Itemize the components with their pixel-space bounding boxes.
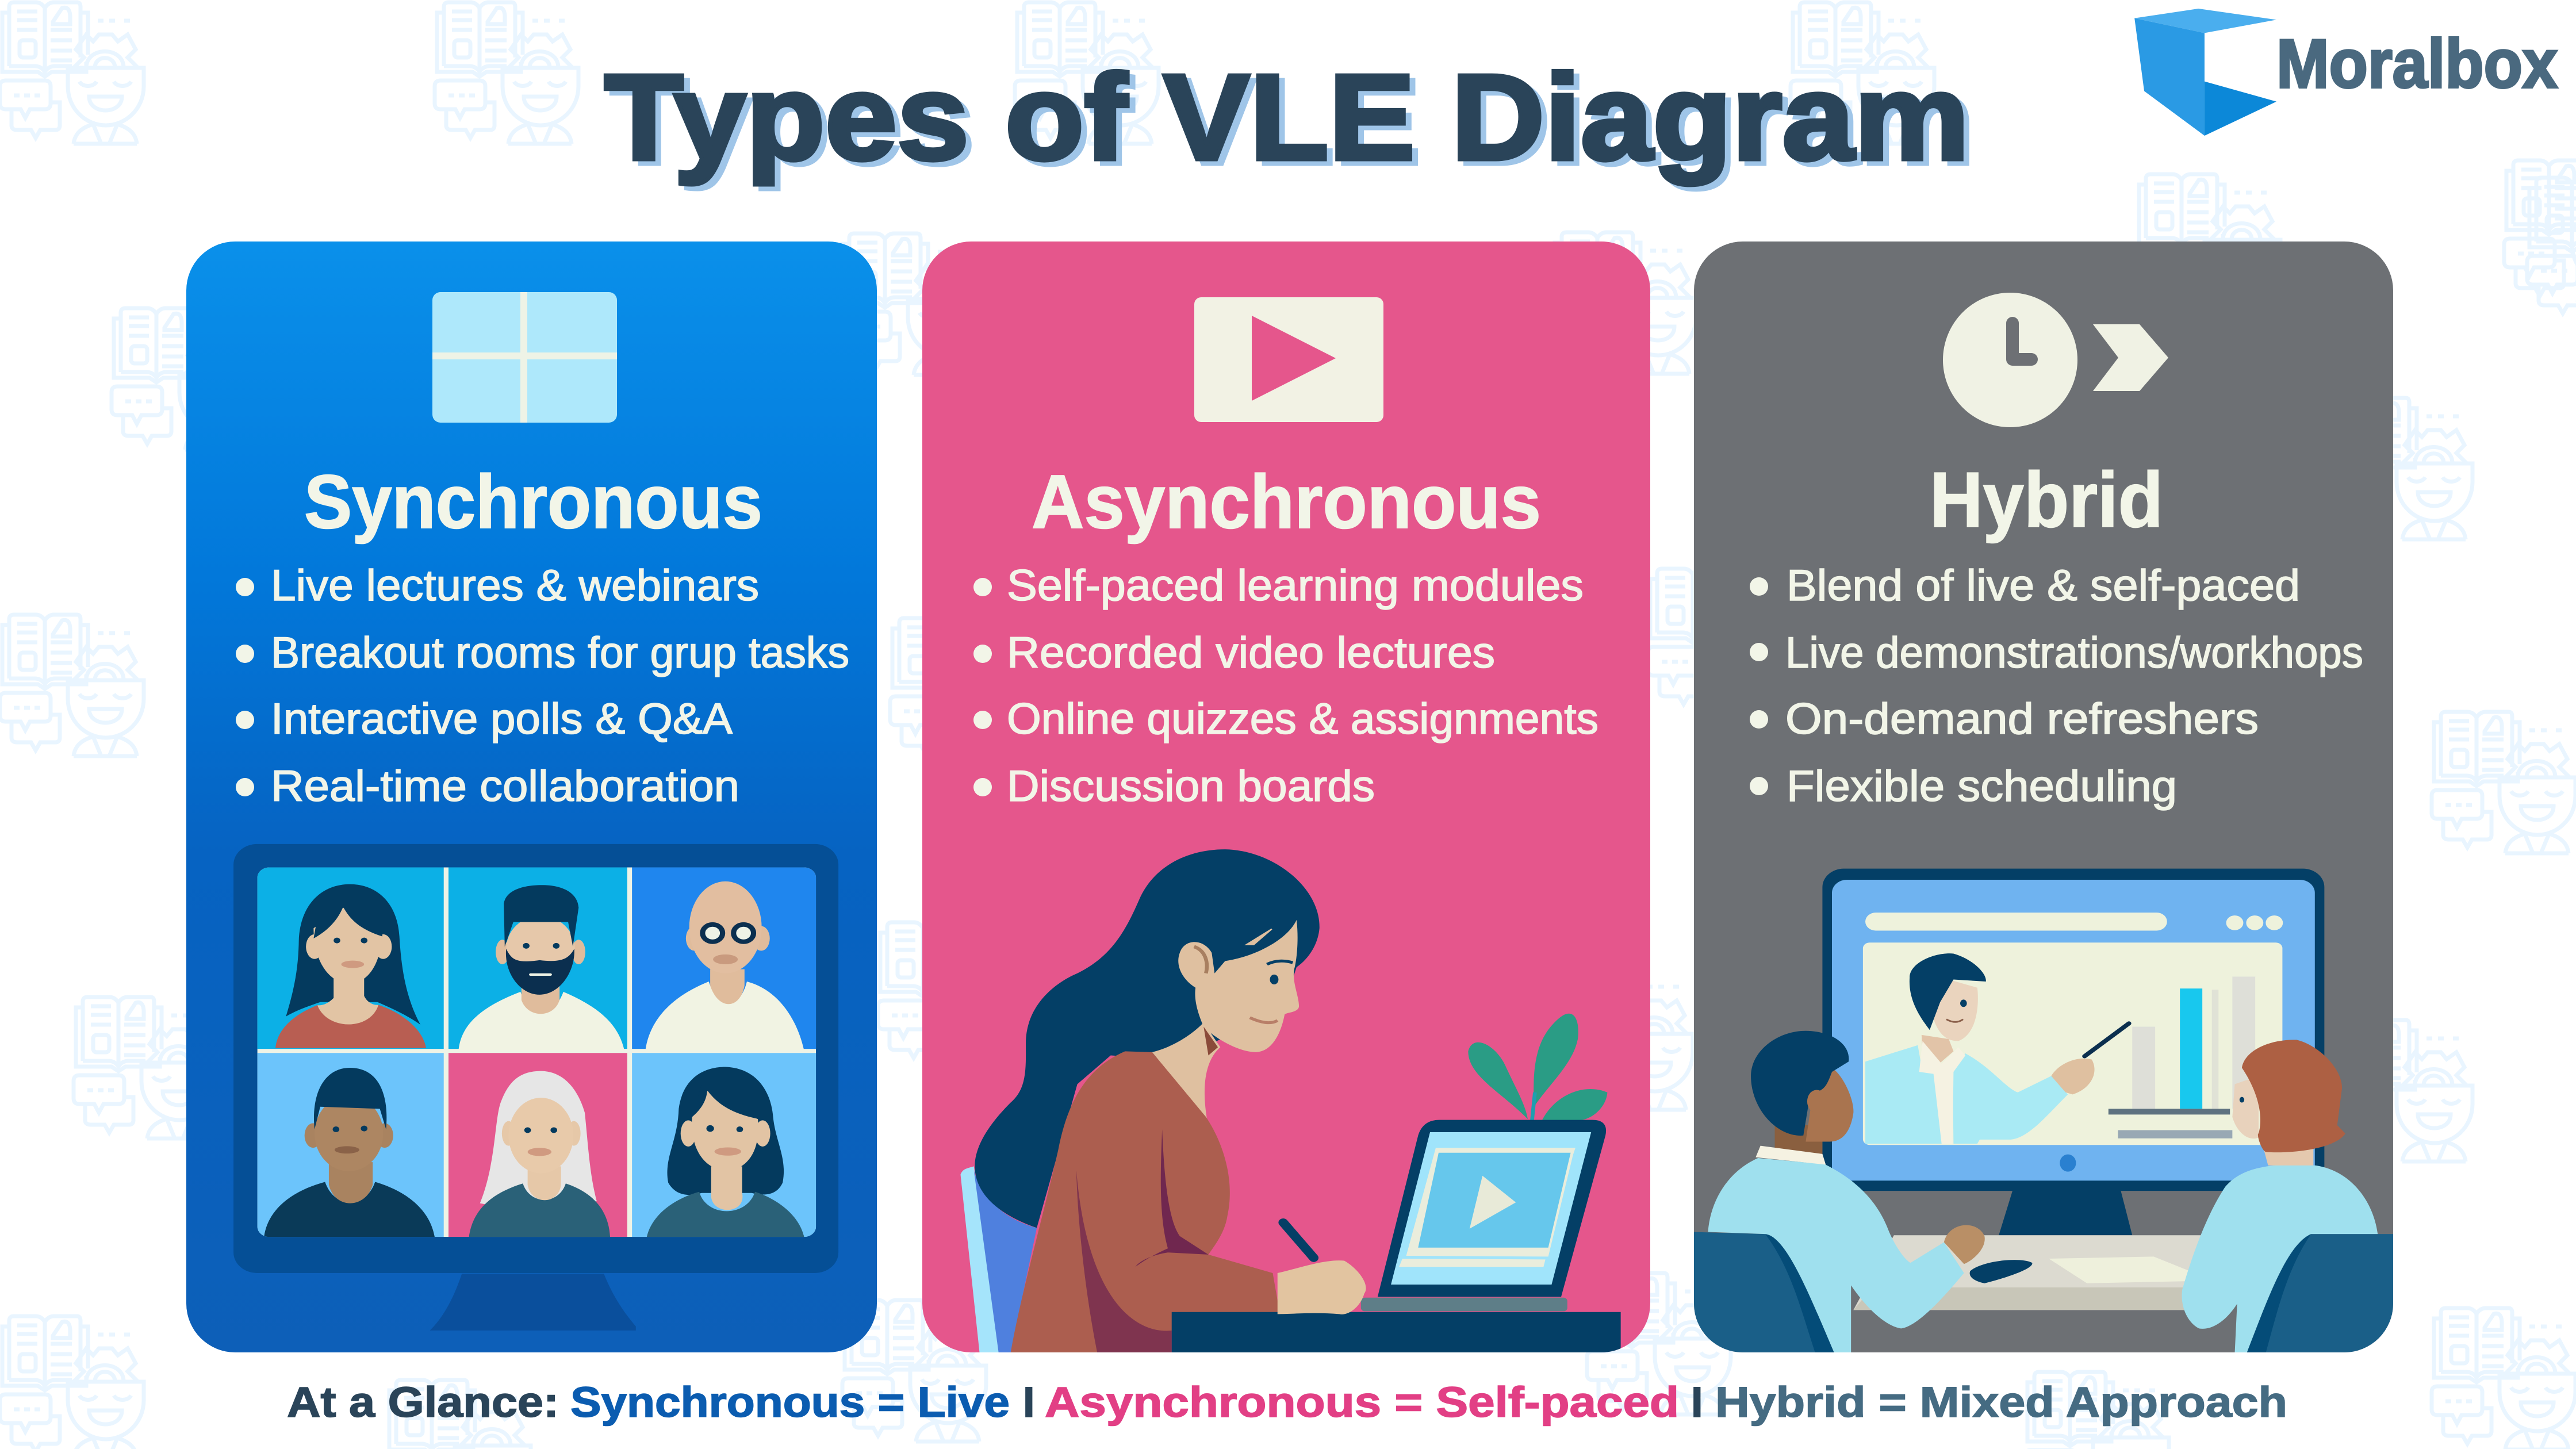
illustration: woman studying at laptop [960, 849, 1621, 1353]
icon: video play [1194, 297, 1383, 422]
laptop [1361, 1120, 1606, 1311]
bullet list: Asynchronous: Recorded video lectures [1007, 628, 1495, 677]
card background blue [186, 241, 877, 1352]
bullet list: Hybrid: Flexible scheduling [1787, 762, 2177, 811]
card background pink [922, 241, 1650, 1352]
student: woman from behind [2182, 1040, 2394, 1353]
title: Types of VLE Diagram [604, 49, 1969, 185]
bullet list: Hybrid: On-demand refreshers [1785, 695, 2259, 743]
summary line: At a Glance: Hybrid = Mixed Approach [1715, 1378, 2287, 1426]
presenter on screen [1865, 953, 2129, 1144]
chart on slide [2109, 976, 2255, 1138]
summary line: At a Glance: At a Glance: [287, 1378, 559, 1426]
summary line: At a Glance [287, 1378, 2287, 1426]
person: bald man with glasses [645, 881, 804, 1051]
panel: Hybrid [1694, 241, 2394, 1353]
icon: logo cube [2134, 9, 2276, 136]
bullet list: Hybrid: Live demonstrations/workhops [1785, 628, 2363, 677]
plant leaves [1468, 1014, 1607, 1120]
logo: Moralbox [2134, 9, 2558, 136]
monitor stand [430, 1274, 636, 1331]
person: woman with white hair [469, 1071, 610, 1237]
bullet list: Asynchronous: Online quizzes & assignments [1007, 695, 1598, 743]
person: woman with dark bob [647, 1067, 804, 1237]
panel: Synchronous [186, 241, 877, 1352]
summary line: At a Glance: I [1023, 1378, 1035, 1426]
illustration: people watching live lesson [1694, 869, 2394, 1353]
logo wordmark: Moralbox [2276, 25, 2558, 102]
student: man from behind [1694, 1031, 1985, 1353]
screen: participant grid [258, 868, 816, 1237]
summary line: At a Glance: Synchronous = Live [570, 1378, 1010, 1426]
icon: clock with arrow [1943, 293, 2168, 427]
person: bearded man [458, 885, 624, 1051]
woman [975, 849, 1320, 1353]
monitor [1822, 869, 2324, 1191]
summary line: At a Glance: Asynchronous = Self-paced [1045, 1378, 1679, 1426]
bullet list: Hybrid: Blend of live & self-paced [1787, 561, 2300, 610]
bullet list: Synchronous [236, 561, 849, 811]
icon: window grid [432, 292, 617, 423]
desk with mouse and paper [1853, 1235, 2204, 1310]
person: long dark hair, red top [275, 884, 426, 1048]
chair [960, 1166, 1037, 1353]
bullet list: Synchronous: Breakout rooms for grup tasks [271, 628, 849, 677]
heading: Hybrid: Hybrid [1930, 456, 2163, 543]
hand holding pen [1278, 1222, 1366, 1314]
summary line: At a Glance: I [1691, 1378, 1703, 1426]
title: Types of VLE Diagram [610, 53, 1975, 190]
desk [1172, 1312, 1621, 1353]
panel: Asynchronous [922, 241, 1650, 1353]
heading: Synchronous: Synchronous [304, 459, 762, 544]
monitor stand [1999, 1189, 2132, 1235]
bullet list: Hybrid [1750, 561, 2363, 811]
person: dark skinned man [264, 1068, 435, 1237]
bullet list: Asynchronous: Discussion boards [1007, 762, 1375, 811]
bullet list: Asynchronous: Self-paced learning modules [1007, 561, 1584, 610]
illustration: video call monitor [233, 844, 838, 1331]
bullet list: Synchronous: Real-time collaboration [271, 762, 739, 811]
bullet list: Asynchronous [973, 561, 1598, 811]
bullet list: Synchronous: Live lectures & webinars [271, 561, 759, 610]
card background gray [1694, 241, 2393, 1352]
heading: Asynchronous: Asynchronous [1032, 459, 1541, 544]
bullet list: Synchronous: Interactive polls & Q&A [271, 695, 733, 743]
monitor frame [233, 844, 838, 1273]
